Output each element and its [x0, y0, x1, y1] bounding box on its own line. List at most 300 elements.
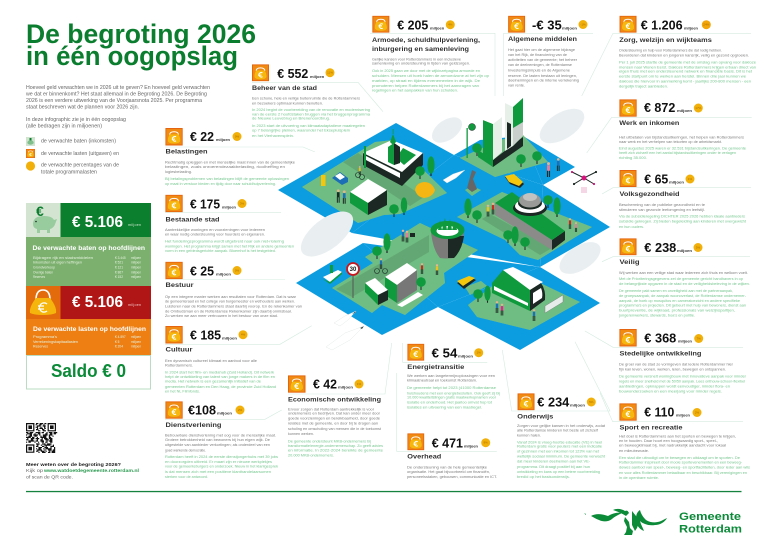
unit: miljoen: [458, 354, 473, 358]
body text: Zo werken we aan meer vertrouwen in het bestuur van onze stad.: [165, 314, 278, 318]
land: statue: [465, 186, 481, 196]
building: kantoor: [365, 263, 423, 307]
panel: Dienstverlening: [165, 401, 278, 479]
percentage coin: 0%: [235, 268, 239, 272]
icon: lasten: [372, 16, 389, 33]
yellow boat: [457, 276, 476, 289]
body text: deelnemingen en de interne verrekening: [508, 78, 579, 82]
body text: mensen naar Wonen Eerst. Dakloze Rotterdammers krijgen erbaan direct van: [619, 65, 756, 69]
amount: € 175: [190, 196, 220, 212]
lasten hoofdlijnen: Programma's: [33, 335, 58, 339]
body text: 20.000 MKB-ondernemers.: [288, 454, 334, 458]
body text: Investeringsimpuls en de Algemene: [508, 69, 570, 73]
body text: buurtpreventie, de wijkraad, professionals van welzijnspartijen,: [619, 309, 735, 313]
panel: Cultuur: [165, 326, 276, 394]
icon: lasten: [26, 149, 35, 158]
amount: € 368: [644, 331, 676, 346]
panel: Algemene middelen: [508, 16, 588, 87]
body text: is dat mensen zich met een positieve klanthandelaarsumen: [165, 470, 271, 474]
body text: gemeenten Rotterdam en Den Haag, de provincie Zuid Holland: [165, 385, 276, 389]
lasten hoofdlijnen: € 4.897: [115, 335, 126, 339]
body text: Aantrekkelijke woningen en voorzieningen voor iedereen: [165, 228, 265, 232]
title: De begroting 2026: [26, 19, 256, 49]
intro text: 2026 is een verdere uitwerking van de Voorjaarsnota 2025. Per programma: [26, 98, 202, 104]
percentage coin: 5%: [589, 400, 594, 404]
body text: In 2024 begint de voorbereiding van de renovatie en modernisering: [252, 108, 370, 112]
unit: miljoen: [464, 444, 478, 448]
title: [26, 19, 256, 71]
body text: bredid op het basisonderwijs.: [517, 475, 570, 479]
icon: lasten: [407, 344, 424, 361]
body text: Luisteren naar de Rotterdammers staat daarbij voorop. En de rekenkamer van: [165, 304, 302, 308]
island: torens details: [466, 98, 560, 177]
heading: inburgering en samenleving: [372, 46, 469, 53]
body text: promoteren helpen Rotterdammers bij het aanvragen van: [372, 84, 479, 88]
panel: begroting totalen: [26, 203, 151, 389]
saldo: Saldo € 0: [51, 361, 126, 381]
body text: Rotterdammers.: [165, 363, 193, 367]
body text: Een stad die uitnodigt om te bewegen en uitdaagt om te sporten. De: [619, 456, 740, 460]
body text: belastingen, zoals onroerendezaakbelasting, rioolheffing en: [165, 165, 285, 169]
people and pram: [402, 230, 438, 275]
unit: miljoen: [684, 26, 698, 30]
lasten header: € 5.106: [72, 294, 123, 311]
island: stadhuis details: [321, 129, 435, 217]
heading: Beheer van de stad: [252, 85, 317, 92]
traffic sign: 30: [350, 267, 357, 273]
body text: In 2023 start de uitvoering van klimaatadaptatieve maatregelen: [252, 124, 365, 128]
heading: Onderwijs: [517, 414, 554, 420]
unit: miljoen: [222, 336, 237, 340]
icon: lasten: [252, 64, 269, 81]
baten hoofdlijnen: € 152: [115, 275, 123, 279]
heading: Economische ontwikkeling: [288, 396, 381, 404]
body text: Het gaat hier om de algemene bijdrage: [508, 48, 575, 52]
amount: € 65: [644, 171, 668, 186]
body text: kunnen halen.: [517, 434, 541, 438]
intro text: we dat er binnenkomt? Het staat allemaal in de Begroting 2026. De Begroting: [26, 92, 207, 98]
trees: [472, 143, 542, 167]
legend text: percentages: totale programmalasten: [41, 170, 97, 176]
body text: de belangrijkste opgaven in de stad en de veiligheidsbeleving in de wijken.: [619, 282, 750, 286]
land: jetty: [465, 281, 487, 295]
baten hoofdlijnen: € 121: [115, 266, 123, 270]
heading: Zorg, welzijn en wijkteams: [619, 37, 712, 44]
trees: [372, 233, 426, 290]
lasten hoofdlijnen: miljoen: [131, 335, 141, 339]
body text: [619, 135, 746, 160]
percentage coin: 3%: [240, 202, 244, 206]
body text: en mileubewuste.: [619, 449, 649, 453]
body text: Zorgen voor gelijke kansen in het onderwijs, zodat: [517, 424, 605, 428]
body text: media. Het netwerk is een gezamenlijk initiatief van de: [165, 380, 261, 384]
building: torens: [478, 98, 523, 167]
body text: en te houden. Daar hoort een hoogwaardig sport-, speel-,: [619, 439, 718, 443]
heading: Sport en recreatie: [620, 424, 683, 432]
trees: [473, 286, 491, 303]
icon: lasten: [518, 393, 535, 410]
body text: Bij betalingsproblemen van belastingen blijft de gemeente oplossingen: [165, 177, 289, 181]
body text: Het doel is Rotterdammers aan het sporten en bewegen te krijgen,: [619, 435, 736, 439]
amount: € 54: [432, 345, 458, 360]
lasten hoofdlijnen: De verwachte lasten op hoofdlijnen: [33, 326, 146, 333]
baten hoofdlijnen: € 3.445: [115, 256, 126, 260]
cyclist: [356, 166, 364, 180]
icon: baten: [26, 137, 35, 146]
body text: Via de subsidieregeling DICHTER 2025 2026 hebben ideale aanbieders: [619, 215, 745, 219]
amount: € 185: [190, 327, 221, 342]
icon: lasten: [165, 195, 183, 212]
body text: relaties met de gemeente, en door bij te dragen aan: [288, 422, 378, 426]
unit: miljoen: [338, 386, 353, 390]
body text: transformatie/energie-ondernemerschap. Zo geeft advies: [288, 444, 383, 448]
body text: en het NL Filmfonds.: [165, 390, 200, 394]
baten hoofdlijnen: € 867: [115, 270, 123, 274]
amount: € 42: [313, 377, 337, 392]
baten hoofdlijnen: Reserves: [33, 275, 45, 279]
body text: Ook in 2025 gaan we door met de wijkinzetpagina armoede en: [372, 69, 480, 73]
percentage coin: 2%: [695, 410, 699, 414]
baten header: [26, 203, 151, 237]
body text: goed werkende democratie.: [165, 448, 206, 452]
title: in één oogopslag: [26, 41, 238, 71]
land: torens: [460, 135, 548, 177]
body text: en bezoekers optimaal kunnen benutten.: [252, 101, 323, 105]
body text: We werken aan langetermijnoplossingen voor een: [407, 374, 495, 378]
body text: activiteiten van de gemeente; het beheer: [508, 58, 578, 62]
body text: dakloos die hiervoor in aanmerking komt - jaarlijks 200-800 mensen - een: [619, 79, 751, 83]
body text: [619, 363, 747, 394]
body text: Betrouwbare dienstverlening met oog voor de menselijke maat.: [165, 433, 276, 437]
panel: Bestaande stad: [165, 195, 294, 253]
body text: regels en meer snelheid met de 50/50 aanpak. Lees onthouw-schoon-flexibel: [619, 380, 745, 384]
body text: [618, 271, 750, 318]
panel: Overhead: [407, 433, 497, 479]
more info text: of scan de QR code.: [26, 474, 73, 480]
cyclist: [374, 258, 388, 274]
heading: Cultuur: [166, 346, 193, 354]
road: wijk: [336, 235, 429, 297]
percentage coin: 5%: [696, 246, 700, 250]
body text: De gemeente pakt samen en onveiligheid aan met de partneraanpak,: [619, 289, 733, 293]
heading: Armoede, schuldhulpverlening,: [372, 37, 480, 44]
body text: [252, 97, 370, 138]
lamp post: [466, 124, 476, 158]
heading: Werk en inkomen: [619, 120, 679, 127]
land: markthal: [468, 270, 580, 330]
body text: helpt de ontwikkeling van talent van jonge makers in de film en: [165, 375, 275, 379]
body text: de Ombudsman en de Rotterdamse Rekenkamer zijn daarbij onmisbaar.: [165, 310, 292, 314]
body text: kunnen werken.: [288, 432, 314, 436]
lasten hoofdlijnen: Reserves: [33, 345, 48, 349]
body text: bouwonderzoeken en een meerjarig voor minder regels.: [619, 390, 722, 394]
lasten header: [26, 286, 151, 319]
body text: [508, 48, 579, 87]
legend text: baten: de verwachte baten (inkomsten): [41, 138, 116, 144]
icon: lasten: [620, 170, 637, 187]
body text: De gemeente helpt tot 2023 (41000 Rotterdamse: [407, 386, 496, 390]
heading: Bestuur: [166, 282, 194, 289]
lasten hoofdlijnen: [26, 319, 151, 355]
body text: in de openbare ruimte.: [619, 476, 659, 480]
lasten hoofdlijnen: Verrekeningskapitaallasten: [33, 340, 78, 344]
body text: schulden. Mensen uit hoek halen de armoedzone at het zijn op: [372, 74, 489, 78]
amount: € 238: [644, 240, 676, 255]
body text: isolatie en onderhoud. Het jaarloo omvat hop tot: [407, 400, 492, 404]
trees: [464, 195, 561, 250]
body text: Rotterdam heeft in 2024 de eerste dienstjongerhubs met 39 jobs: [165, 455, 278, 459]
body text: [165, 433, 278, 479]
island: museum details: [464, 192, 577, 250]
logo: wordmark: [679, 511, 742, 536]
intro text: In deze infographic zie je in één oogopslag: [26, 117, 126, 123]
body text: Rotterdammer inspireert door mooie sportevenementen en een beweeg-: [619, 461, 743, 465]
people: [547, 158, 560, 177]
icon: percentage coin: [26, 161, 35, 171]
body text: [517, 424, 605, 479]
body text: heeft zich zichzelf een het aantal bijstandsuitkeringen onder te verlagen: [619, 151, 736, 155]
icon: lasten: [165, 128, 183, 146]
body text: en het Vierhavensplein.: [252, 134, 294, 138]
baten hoofdlijnen: De verwachte baten op hoofdlijnen: [32, 245, 145, 252]
amount: € 234: [537, 395, 570, 410]
icon: lasten: [165, 401, 183, 419]
baten hoofdlijnen: Overige baten: [33, 270, 53, 274]
baten header: €: [36, 203, 44, 219]
body text: regelingen en het aanpakken van hun schulden.: [372, 89, 458, 93]
unit: miljoen: [562, 26, 577, 30]
green boat: [323, 265, 342, 284]
body text: [407, 465, 497, 479]
panel: Zorg, welzijn en wijkteams: [619, 16, 756, 89]
market stalls: [545, 295, 563, 313]
panel: Veilig: [618, 238, 750, 318]
heading: [372, 37, 480, 53]
icon: lasten: [407, 433, 424, 450]
body text: klimaatneutraal en toekomst Rotterdam.: [407, 379, 477, 383]
body text: en doorzorgden uitbreid. Er maart zijn er nieuwe werkplekjes: [165, 460, 272, 464]
building: stadhuis: [363, 129, 423, 186]
heading: Bestaande stad: [166, 216, 220, 224]
lasten hoofdlijnen: € 204: [115, 345, 123, 349]
body text: naar werk en het verhelpen van tekorten op de arbeidsmarkt.: [619, 140, 722, 144]
building: bol: [430, 218, 464, 258]
body text: scholing en omscholing van mensen die in de toekomst: [288, 427, 381, 431]
body text: Met de Prioriteringsgegevens zet de gemeente gericht handhavers in op: [619, 277, 743, 281]
baten header: € 5.106: [72, 214, 123, 231]
body text: dergelijk traject aanbieden.: [619, 85, 668, 89]
logo: lion and flourish: [584, 509, 667, 535]
body text: De gemeente ondersteunt MKB-ondernemers bij: [288, 439, 371, 443]
amount: €108: [188, 403, 216, 418]
body text: De gemeente versnelt woningbouw met innovatieve aanpak voor minder: [619, 375, 747, 379]
body text: 10.000 kwaliteitslingen gratis maatwerkopnamen voor: [407, 396, 497, 400]
people: [496, 301, 535, 321]
panel: Energietransitie: [407, 344, 500, 409]
baten hoofdlijnen: € 521: [115, 261, 123, 265]
body text: fijn kan leven, wonen, werken, leren, bewegen en ontspannen.: [619, 367, 726, 371]
logo: Gemeente Rotterdam: [584, 509, 742, 536]
body text: In 2024 start het film- en mediahub (Zuid Holland). Dit netwerk: [165, 371, 274, 375]
panel: Werk en inkomen: [619, 99, 746, 160]
body text: Wij werken aan een veilige stad waar iedereen zich thuis en welkom voelt.: [619, 271, 748, 275]
amount: € 552: [277, 66, 308, 81]
building: museum: [495, 192, 565, 250]
body text: of gezinnen met een inkomen tot 123% van het: [517, 450, 599, 454]
body text: Ervoor zorgen dat Rotterdam aantrekkelijk is voor: [288, 407, 375, 411]
percentage coin: 7%: [697, 336, 701, 340]
body text: Vanaf 2024 is vroeg-hoofse educatie (VE) in heel: [517, 441, 602, 445]
footer rule: [26, 491, 742, 492]
body text: richting 35.000.: [619, 156, 647, 160]
percentage coin: 11%: [327, 71, 333, 75]
intro text: (alle bedragen zijn in miljoenen): [26, 124, 102, 130]
body text: programma's en projecten. Dit gebeurt met hulp van bewoners, dienst aan: [619, 303, 746, 307]
body text: wettelijk sociaal minimum. De gemeente verwacht: [517, 455, 605, 459]
unit: miljoen: [570, 404, 585, 408]
body text: goede voorzieningen en bereikbaarheid, door goede: [288, 417, 380, 421]
island: wijk details: [347, 218, 464, 307]
body text: en voor alles Rotterdammer betaalbaar en beschikbaar. Bij verenigingen en: [619, 471, 747, 475]
baten hoofdlijnen: miljoen: [131, 256, 141, 260]
legend text: percentages: [41, 162, 119, 176]
lasten hoofdlijnen: miljoen: [131, 340, 141, 344]
legend text: lasten: de verwachte lasten (uitgaven) en: [41, 151, 119, 157]
body text: op maat in verstuur bieden en tijdig door naar schuldhulpverlening.: [165, 182, 276, 186]
body text: [165, 228, 294, 253]
heading: Dienstverlening: [166, 422, 222, 429]
body text: De groei van de stad zo vormgeven dat iedere Rotterdammer hier: [619, 363, 734, 367]
body text: [165, 295, 302, 318]
body text: de groepsaanpak, de aanpak woonoverlast, de Rotterdamse ondernemer-: [619, 294, 747, 298]
body text: markten, op straat en tijdens evenementen in de wijk. De: [372, 79, 480, 83]
connector lines: [165, 33, 752, 451]
percentage coin: 2%: [238, 408, 242, 412]
panel: Stedelijke ontwikkeling: [619, 329, 747, 394]
percentage coin: -1%: [580, 22, 586, 26]
body text: Bevorderen dat kinderen en jongeren kansrijk, veilig en gezond opgroeien.: [619, 54, 749, 58]
yellow sculpture: [415, 182, 435, 198]
water: [278, 123, 610, 350]
people: [337, 189, 346, 204]
body text: ondernemers en bedrijven. Dat kan onder meer door: [288, 412, 381, 416]
percentage coin: 4%: [448, 23, 453, 27]
unit: miljoen: [222, 206, 236, 210]
unit: miljoen: [669, 180, 684, 184]
body text: Het uitbetalen van bijstandsuitkeringen, het helpen van Rotterdammers: [619, 135, 744, 139]
body text: [372, 57, 489, 93]
body text: Eind augustus 2025 waren er 32.531 bijstandsuitkeringen. De gemeente: [619, 147, 746, 151]
body text: Het funderingsprogramma wordt uitgebreid naar ook niet-riolering: [165, 240, 284, 244]
baten hoofdlijnen: Bijdragen rijk en stadsmiddelen: [33, 256, 93, 260]
percentage coin: 17%: [695, 106, 702, 110]
body text: Een schone, hele en veilige buitenruimte die de Rotterdammers: [252, 97, 360, 101]
more info text: [26, 462, 139, 480]
building: blok: [350, 179, 387, 215]
amount: € 25: [190, 263, 214, 278]
body text: en informatie. In 2022-2024 bereikte de gemeente: [288, 449, 383, 453]
body text: de Nieuwe Leuvebrug en Brienenoordbrug.: [252, 116, 330, 120]
unit: miljoen: [677, 109, 692, 113]
baten hoofdlijnen: miljoen: [131, 266, 141, 270]
body text: Grotere betrokkenheid van bewoners bij hun eigen wijk. De: [165, 438, 270, 442]
percentage coin: 1%: [688, 177, 692, 181]
icon: lasten: [619, 99, 637, 117]
percentage coin: 1%: [477, 351, 481, 355]
QR code: [26, 423, 57, 453]
body text: vorm in een gebiedsgerichte aanpak. Bloemhof is het testgebied.: [165, 249, 276, 253]
baten hoofdlijnen: Grondverkoop: [33, 266, 55, 270]
body text: samenleving en ondersteuning in tijden van geldzorgen.: [372, 62, 470, 66]
unit: miljoen: [678, 340, 692, 344]
body text: op 7 belangrijke pleinen, waaronder het Eksepluisplein: [252, 129, 350, 133]
icon: lasten: [620, 238, 637, 255]
body text: Rotterdam gratis voor peuters met een indicatie: [517, 445, 602, 449]
more info text: Meer weten over de begroting 2026?: [26, 462, 121, 467]
body text: isolaties en uitvoering van een maatregel.: [407, 405, 482, 409]
baten hoofdlijnen: [26, 237, 151, 286]
unit: miljoen: [676, 414, 690, 418]
body text: Per 1 juli 2025 startte de gemeente met de omslag van opvang voor dakloze: [619, 61, 756, 65]
body text: [407, 374, 500, 409]
body text: logiesbelasting.: [165, 170, 192, 174]
heading: Volksgezondheid: [620, 191, 680, 198]
body text: personeelsstaken, gebouwen, communicatie en ICT.: [407, 475, 497, 479]
unit: miljoen: [216, 138, 230, 142]
boat: [505, 174, 524, 188]
road: museum: [482, 214, 552, 255]
drone: [571, 171, 597, 193]
road: stadhuis: [343, 153, 424, 206]
clouds: [293, 102, 606, 280]
legend: [26, 137, 119, 176]
body text: huishoudens met een energiebesluiten. Ook geeft zij bij: [407, 391, 500, 395]
island: markthal details: [473, 267, 563, 321]
land: stadhuis: [302, 140, 447, 223]
body text: [288, 407, 383, 458]
body text: Een dynamisch cultureel klimaat en aanbod voor alle: [165, 359, 257, 363]
land: wijk: [332, 223, 478, 315]
icon: lasten: [508, 16, 525, 33]
intro text: staat beschreven wat de plannen voor 2026 zijn.: [26, 104, 139, 110]
amount: -€ 35: [532, 17, 562, 32]
unit: miljoen: [217, 412, 232, 416]
body text: dat meer kinderen deelnemen aan het VE-: [517, 460, 591, 464]
lasten hoofdlijnen: miljoen: [131, 345, 141, 349]
percentage coin: 4%: [241, 333, 245, 337]
more info text: Kijk op: [26, 468, 44, 473]
body text: [619, 203, 746, 229]
baten hoofdlijnen: Inkomsten uit eigen heffingen: [33, 261, 82, 265]
saldo: [26, 356, 150, 389]
body text: dewes aanbod van speel-, beweeg- en sportfaciliteiten, door ieder aan wils: [619, 466, 750, 470]
percentage coin: 9%: [484, 441, 488, 445]
body text: eigen thuis met een ondersteunend netwerk en financiële basis. Dit is het: [619, 70, 752, 74]
amount: € 205: [397, 17, 428, 32]
more info text: www.watdoetdegemeente.rotterdam.nl: [43, 468, 139, 473]
body text: eerste startpunt om te werken aan herstel. Binnen drie jaar kunnen we: [619, 75, 746, 79]
intro text: Hoeveel geld verwachten we in 2026 uit te geven? En hoeveel geld verwachten: [26, 85, 210, 91]
body text: voor de gemeenteburgers en onderzoek. Nieuw in het klantgesprek: [165, 465, 278, 469]
gull: [443, 170, 465, 183]
amount: € 471: [432, 435, 463, 450]
unit: miljoen: [430, 26, 444, 30]
body text: organisatie. Het gaat bijvoorbeeld om financiën,: [407, 470, 490, 474]
legend text: percentages: de verwachte percentages van de: [41, 162, 119, 168]
logo: wordmark: Rotterdam: [679, 524, 742, 536]
heading: Belastingen: [166, 148, 208, 156]
icon: lasten: [165, 262, 183, 279]
